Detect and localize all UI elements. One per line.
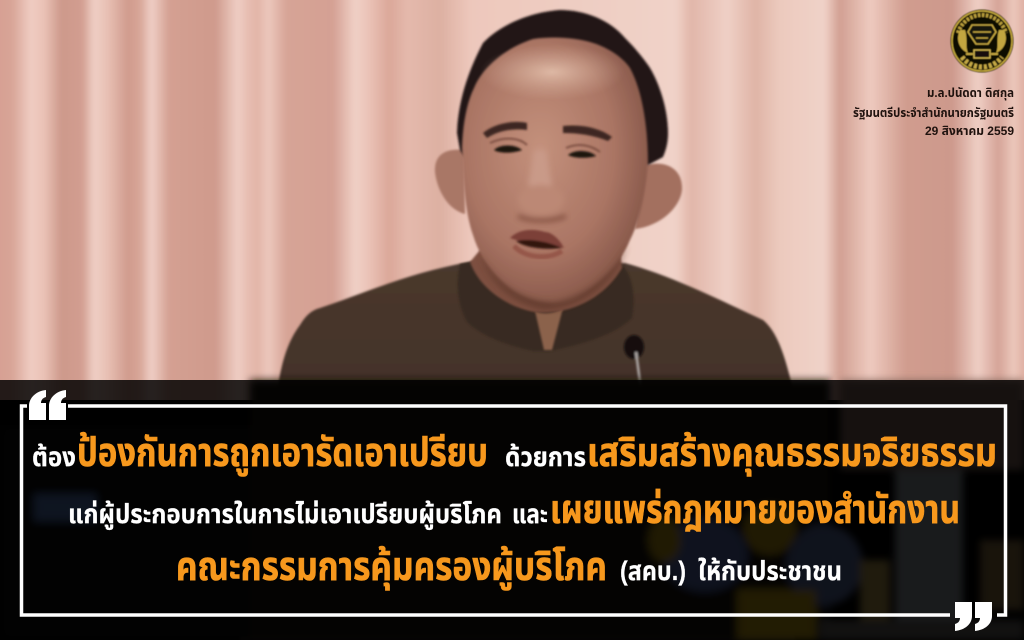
nose (518, 150, 566, 220)
closing quote mark (955, 602, 992, 631)
hair (457, 10, 668, 165)
brows (483, 122, 527, 138)
dark overlay panel (0, 380, 1024, 640)
quote frame (22, 406, 1006, 615)
mouth (510, 230, 564, 257)
background props under panel (0, 380, 1024, 640)
quote text line 3: ให้กับประชาชน (698, 556, 842, 586)
quote text line 1: ด้วยการ (505, 442, 586, 472)
quote text line 2: และ (512, 499, 548, 529)
emblem seal (950, 10, 1014, 72)
collar (458, 262, 634, 351)
quote text line 2 (68, 487, 960, 532)
eyes (490, 139, 600, 158)
quote text line 1 (32, 430, 997, 477)
quote text line 1: ป้องกันการถูกเอารัดเอาเปรียบ (77, 431, 488, 477)
byline: ม.ล.ปนัดดา ดิศกุล (927, 86, 1014, 100)
quote text line 2: แก่ผู้ประกอบการในการไม่เอาเปรียบผู้บริโภค (68, 499, 502, 530)
quote text line 3: คณะกรรมการคุ้มครองผู้บริโภค (176, 544, 607, 591)
byline: 29 สิงหาคม 2559 (925, 124, 1014, 138)
quote text line 1: ต้อง (32, 442, 76, 472)
opening quote mark (29, 390, 66, 420)
curtain background (0, 0, 1024, 400)
microphone (624, 335, 645, 420)
right ear (635, 164, 682, 229)
collar notch (535, 308, 563, 350)
chin shade (480, 245, 628, 310)
suit shoulders (240, 262, 795, 640)
photo: speaker (240, 10, 795, 640)
neck (470, 250, 622, 312)
forehead highlight (480, 44, 624, 100)
quote text line 3: (สคบ.) (620, 556, 686, 586)
face (462, 38, 648, 303)
byline (853, 86, 1014, 138)
byline: รัฐมนตรีประจำสำนักนายกรัฐมนตรี (853, 106, 1014, 120)
left ear (435, 150, 465, 214)
